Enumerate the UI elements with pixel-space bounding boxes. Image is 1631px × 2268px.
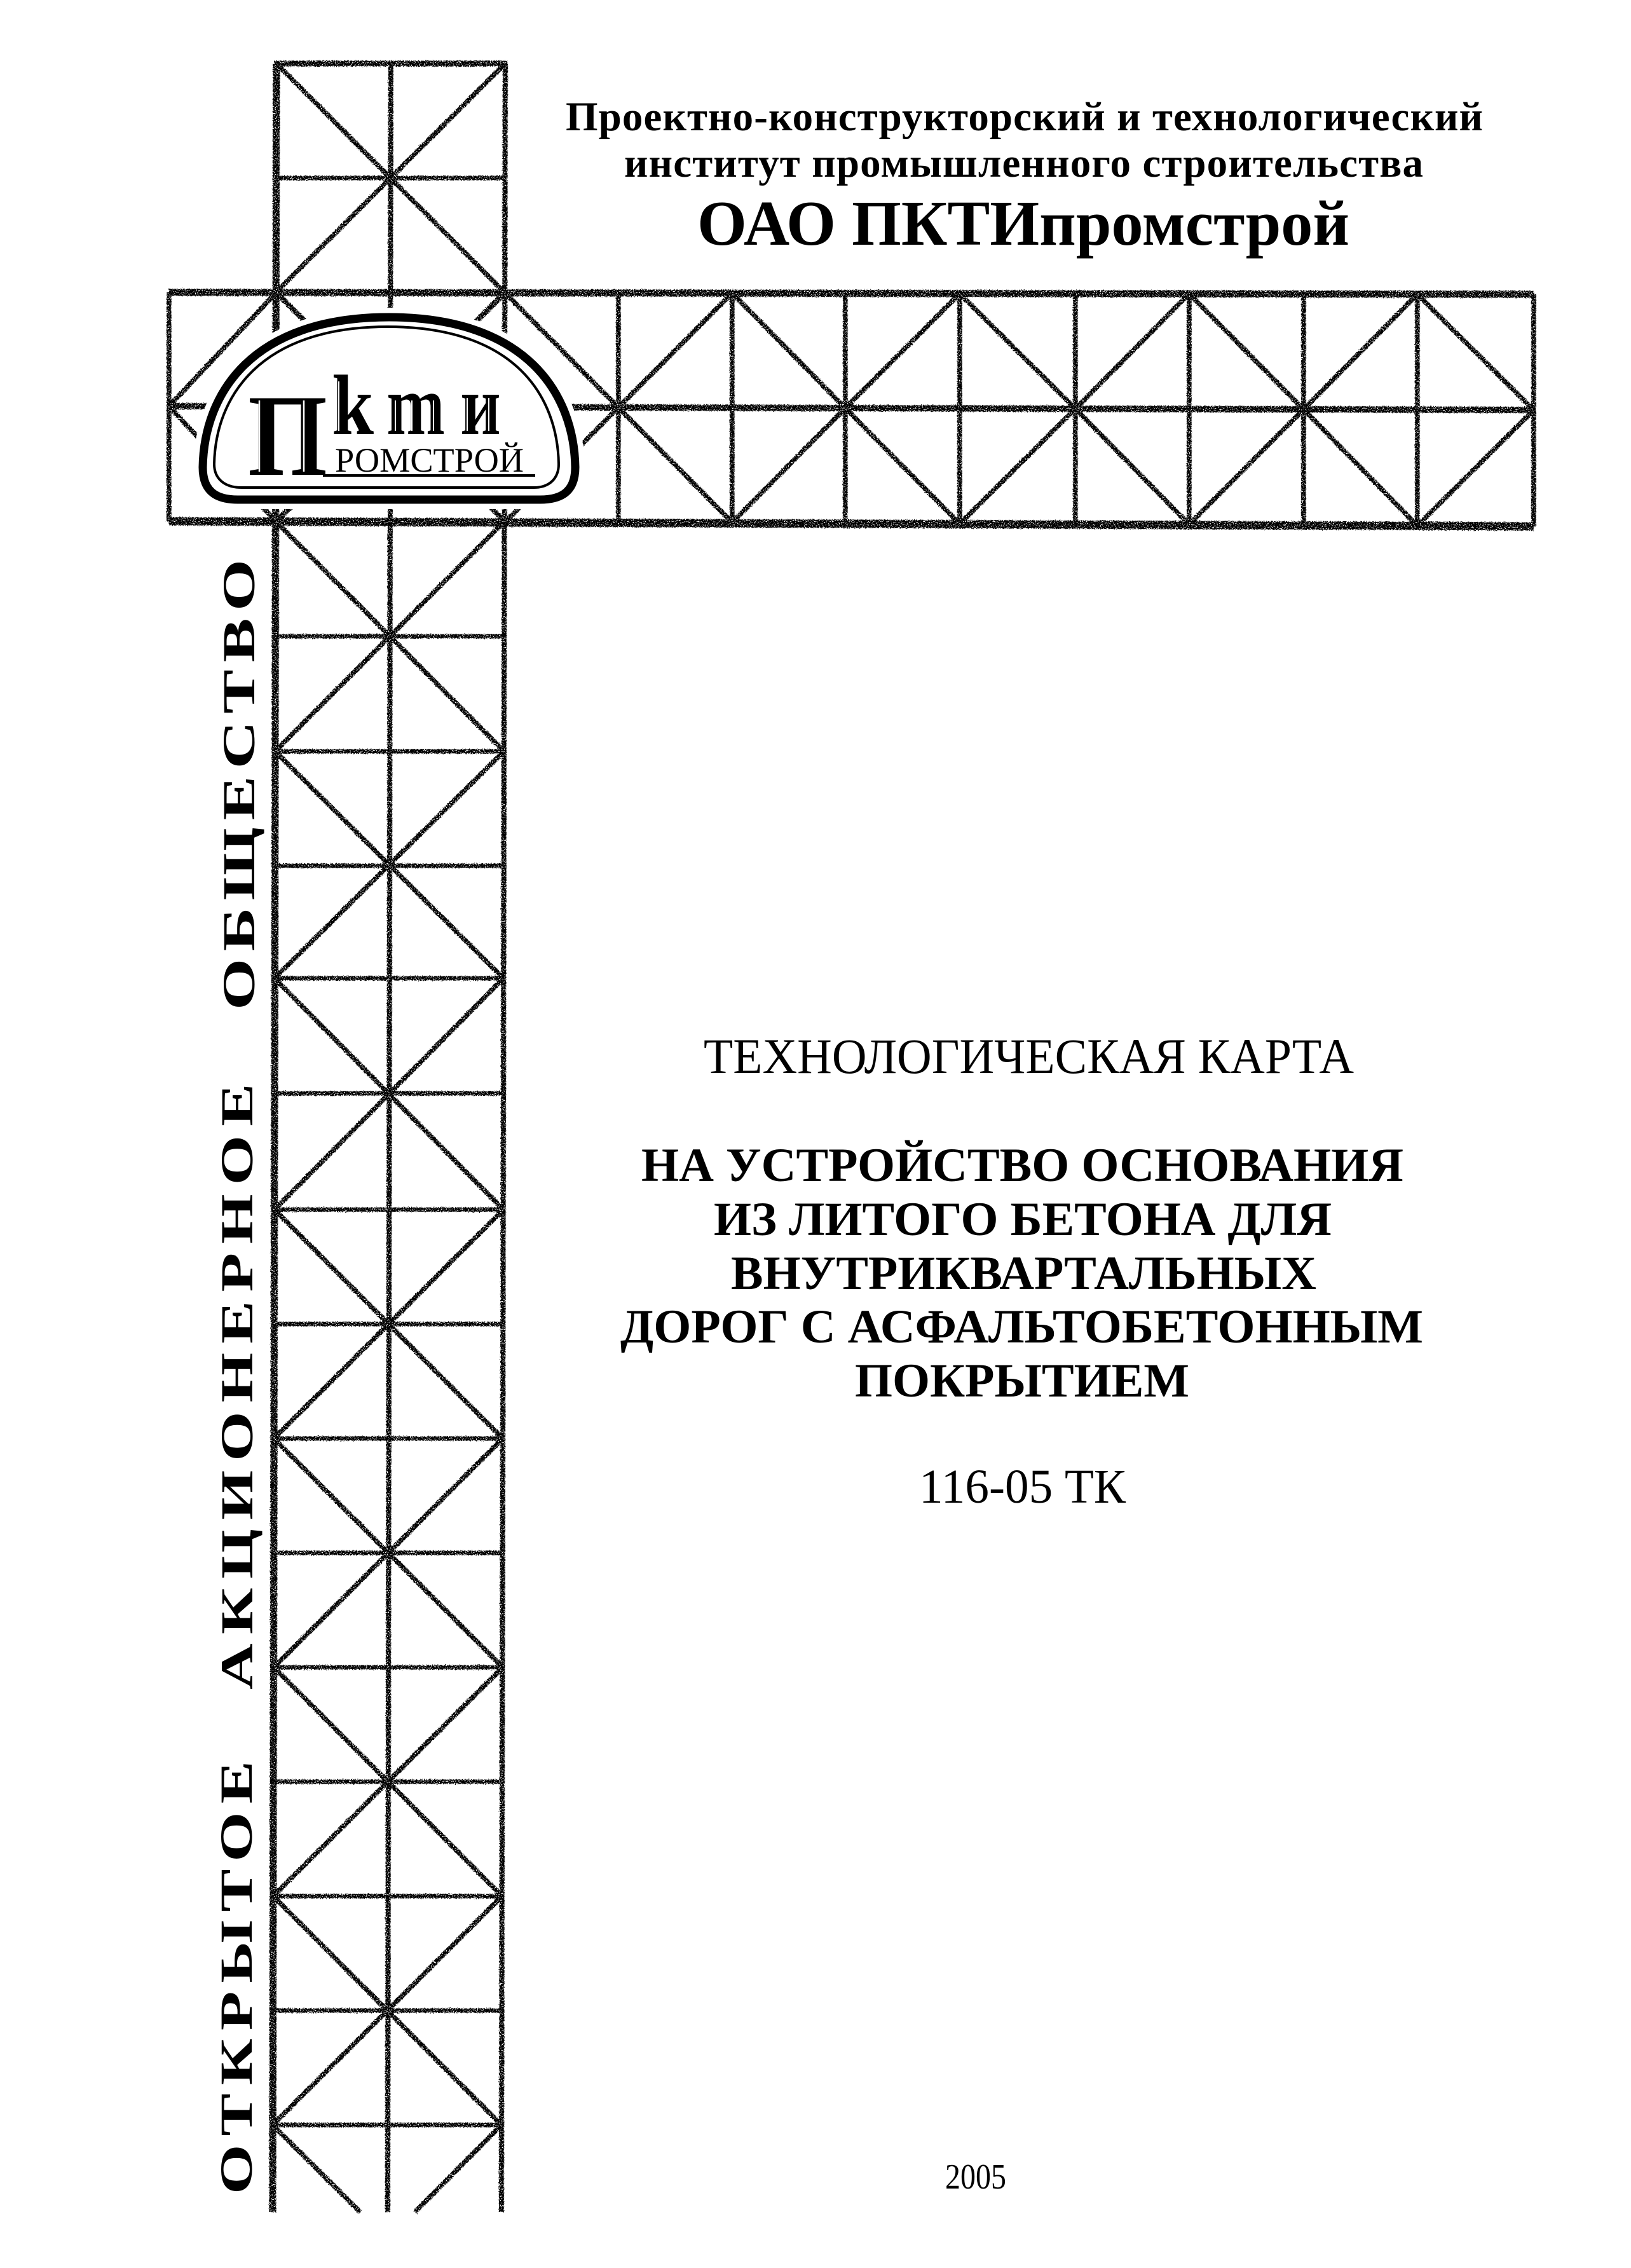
vertical text: organisation type: ОТКРЫТОЕ [211, 1761, 262, 2194]
year: 2005 [945, 2157, 1006, 2197]
logo letters kmи [332, 359, 501, 453]
document title: ИЗ ЛИТОГО БЕТОНА ДЛЯ [714, 1193, 1332, 1246]
logo letter П: П [248, 371, 327, 500]
logo letters kmи: k [332, 359, 374, 453]
document title: ВНУТРИКВАРТАЛЬНЫХ [731, 1247, 1316, 1300]
vertical text: organisation type: ОБЩЕСТВО [214, 559, 264, 1010]
document title [620, 1139, 1423, 1407]
logo letters kmи: m [386, 359, 445, 453]
header: institute name: Проектно-конструкторский и технологический [566, 94, 1483, 140]
logo letters kmи: и [460, 359, 501, 453]
header: institute name: институт промышленного строительства [624, 140, 1423, 186]
document title: ПОКРЫТИЕМ [855, 1355, 1189, 1407]
document title: ДОРОГ С АСФАЛЬТОБЕТОННЫМ [620, 1301, 1423, 1353]
crane jib (horizontal lattice boom) [169, 292, 1534, 526]
document number: 116-05 ТК [919, 1460, 1126, 1513]
crane lattice illustration [169, 64, 1534, 2212]
logo word РОМСТРОЙ with underline: РОМСТРОЙ [335, 441, 524, 479]
header: institute name [566, 94, 1483, 259]
document type heading: ТЕХНОЛОГИЧЕСКАЯ КАРТА [704, 1028, 1354, 1084]
header: institute name: ОАО ПКТИпромстрой [697, 188, 1349, 259]
crane mast (vertical lattice tower) [273, 64, 507, 2212]
logo: ПКТИ Промстрой dome badge [203, 317, 575, 500]
dome outline [203, 317, 575, 500]
vertical text: organisation type [211, 559, 264, 2194]
vertical text: organisation type: АКЦИОНЕРНОЕ [212, 1084, 263, 1690]
document title: НА УСТРОЙСТВО ОСНОВАНИЯ [641, 1139, 1403, 1192]
